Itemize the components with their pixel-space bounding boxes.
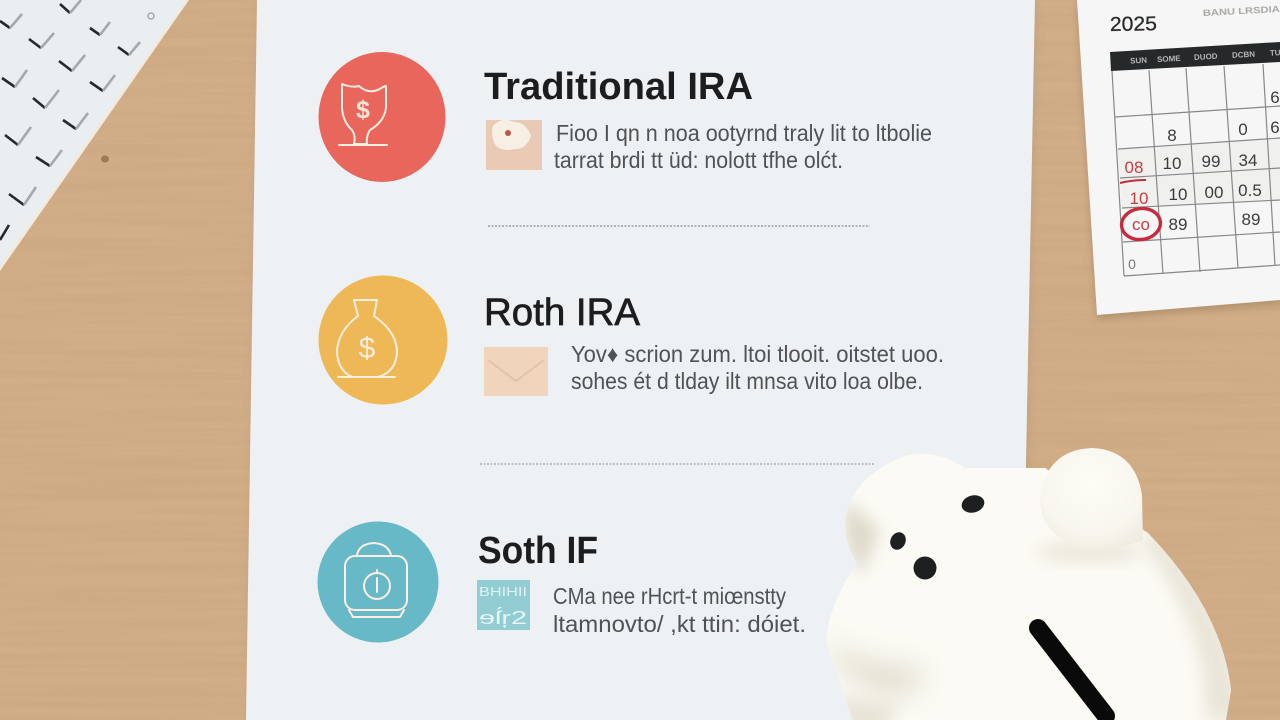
calendar numbers: 0.5	[1238, 181, 1262, 200]
thumbnail: teal data card: BHIHII	[479, 584, 527, 599]
coin slot	[1038, 628, 1106, 716]
body silhouette with soft shading	[820, 440, 1240, 720]
calendar numbers: 10	[1130, 189, 1148, 208]
calendar numbers: 00	[1205, 183, 1223, 202]
dotted divider 2	[480, 463, 875, 465]
red marks: underline and circled date	[1120, 180, 1162, 242]
right ear	[1040, 448, 1143, 550]
description	[553, 583, 806, 637]
icon: red shield with dollar	[318, 52, 446, 182]
calendar numbers: 6	[1270, 88, 1280, 107]
calendar numbers: 0	[1238, 120, 1248, 139]
date grid	[1112, 64, 1280, 276]
description: ltamnovto/ ,kt ttin: dóiet.	[553, 611, 806, 637]
eyes and nostril dots	[887, 493, 986, 580]
thumbnail: envelope	[484, 347, 548, 396]
row 2: Roth IRA	[318, 276, 944, 404]
heading: Traditional IRA: Traditional IRA	[484, 66, 753, 108]
paper sheet	[246, 0, 1037, 720]
calendar numbers: 10	[1169, 185, 1187, 204]
weekday header bar: DCBN	[1232, 50, 1256, 60]
description: Yov♦ scrion zum. ltoi tlooit. oitstet uoo.	[571, 341, 944, 367]
description	[554, 120, 932, 173]
description: CMa nee rHcrt-t miœnstty	[553, 583, 786, 609]
calendar numbers: 6	[1270, 118, 1280, 137]
icon: red shield with dollar: $	[356, 96, 370, 124]
calendar numbers: 08	[1125, 158, 1143, 177]
weekday header bar: SUN	[1130, 56, 1147, 66]
calendar numbers	[1125, 88, 1280, 272]
icon: yellow money bag	[318, 276, 448, 404]
dotted divider 1	[488, 225, 870, 227]
heading: Roth IRA: Roth IRA	[484, 292, 641, 334]
thumbnail: puzzle piece	[486, 120, 542, 170]
icon: teal case with timer	[318, 522, 438, 642]
weekday header bar	[1110, 42, 1280, 71]
month label: BANU LRSDIA	[1203, 4, 1280, 18]
description: Fioo I qn n noa ootyrnd traly lit to ltbolie	[556, 120, 932, 146]
calendar numbers: 0	[1128, 256, 1136, 272]
piggy bank	[820, 440, 1240, 720]
calendar numbers: 89	[1242, 210, 1260, 229]
description: sohes ét d tlday ilt mnsa vito loa olbe.	[571, 368, 923, 394]
description: tarrat brdi tt üd: nolott tfhe olćt.	[554, 147, 843, 173]
row 1: Traditional IRA	[318, 52, 932, 182]
thumbnail: teal data card: ɘſ́ŗ2	[479, 607, 527, 628]
calendar numbers: 99	[1202, 152, 1220, 171]
wall calendar	[1077, 0, 1280, 319]
calendar numbers: 34	[1239, 151, 1257, 170]
thumbnail: teal data card	[477, 580, 530, 630]
keyboard corner	[0, 0, 189, 271]
icon: yellow money bag: $	[359, 332, 376, 365]
shaded date cells	[1118, 138, 1280, 208]
calendar numbers: 8	[1167, 126, 1177, 145]
heading: Soth IF: Soth IF	[478, 530, 598, 572]
calendar numbers: 89	[1169, 215, 1187, 234]
weekday header bar: DUOD	[1194, 52, 1218, 62]
calendar numbers: 10	[1163, 154, 1181, 173]
calendar numbers: co	[1132, 215, 1150, 234]
weekday header bar: SOME	[1157, 54, 1182, 64]
row 3: Soth IF	[318, 522, 806, 642]
description	[571, 341, 944, 394]
year label: 2025	[1110, 13, 1157, 36]
